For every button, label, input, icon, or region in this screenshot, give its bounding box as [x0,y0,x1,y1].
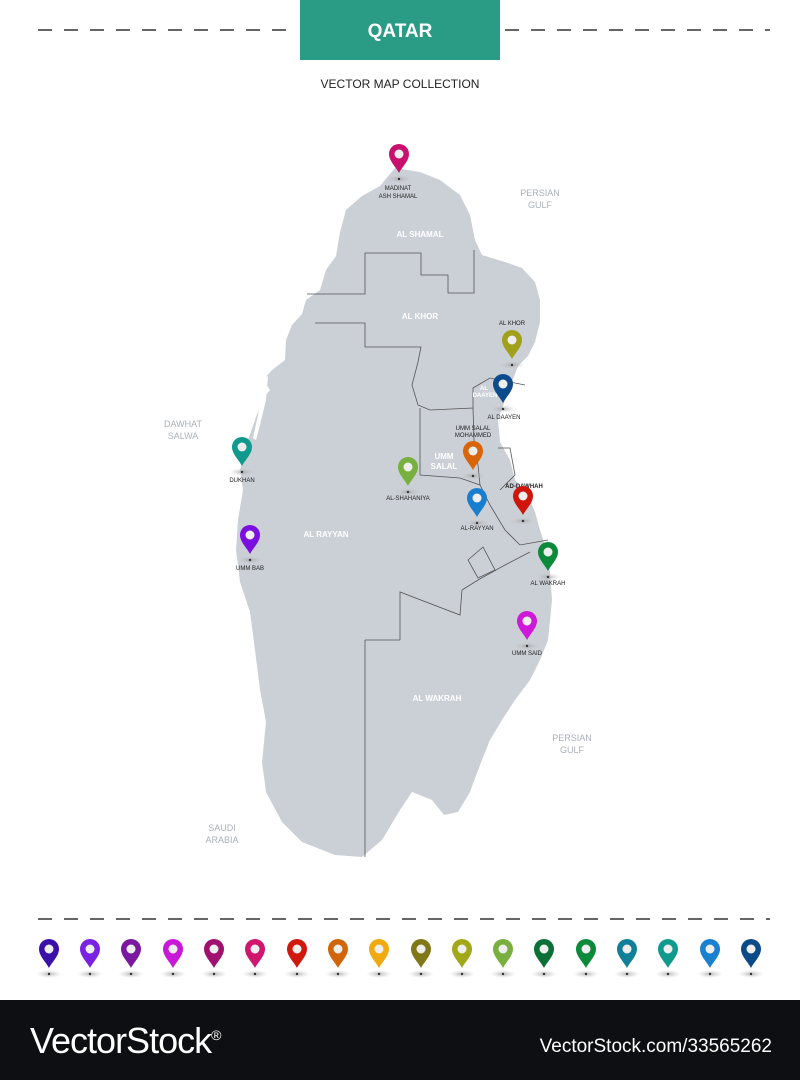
footer url: VectorStock.com/33565262 [540,1036,772,1057]
city labels [229,186,565,657]
region labels: AL RAYYAN [303,530,349,539]
water labels [164,188,592,845]
city labels: ASH SHAMAL [379,194,418,200]
city labels: AL DAAYEN [487,415,521,421]
city labels: UMM SALAL [456,426,491,432]
city labels: MOHAMMED [455,433,492,439]
water labels: DAWHAT [164,419,202,429]
bottom dashed line [38,918,770,920]
city labels: AL-SHAHANIYA [386,496,430,502]
city labels: UMM BAB [236,566,264,572]
footer banner [0,1000,800,1080]
map pins [229,144,561,650]
region labels: AL SHAMAL [397,230,444,239]
water labels: PERSIAN [552,733,592,743]
water labels: SALWA [168,431,198,441]
water labels: PERSIAN [520,188,560,198]
region labels: AL [480,386,488,392]
region labels: UMM [434,452,454,461]
pin color legend row [36,939,764,978]
city labels: AL WAKRAH [531,581,565,587]
region labels: AL KHOR [402,312,438,321]
city labels: AD-DAWHAH [505,484,543,490]
city labels: DUKHAN [229,478,255,484]
water labels: ARABIA [205,835,239,845]
map: Qatar [164,144,592,857]
title box [300,0,500,60]
water labels: SAUDI [208,823,236,833]
city labels: UMM SAID [512,651,543,657]
city labels: MADINAT [385,186,412,192]
water labels: GULF [560,745,584,755]
region labels: AL WAKRAH [413,694,462,703]
city labels: AL-RAYYAN [460,526,494,532]
footer brand: VectorStock® [30,1020,220,1061]
water labels: GULF [528,200,552,210]
top dashed line [38,29,770,31]
region labels [303,230,497,703]
title box: QATAR [368,21,433,42]
city labels: AL KHOR [499,321,526,327]
region labels: DAAYEN [473,393,497,399]
subtitle: VECTOR MAP COLLECTION [321,77,479,91]
region labels: SALAL [431,462,457,471]
